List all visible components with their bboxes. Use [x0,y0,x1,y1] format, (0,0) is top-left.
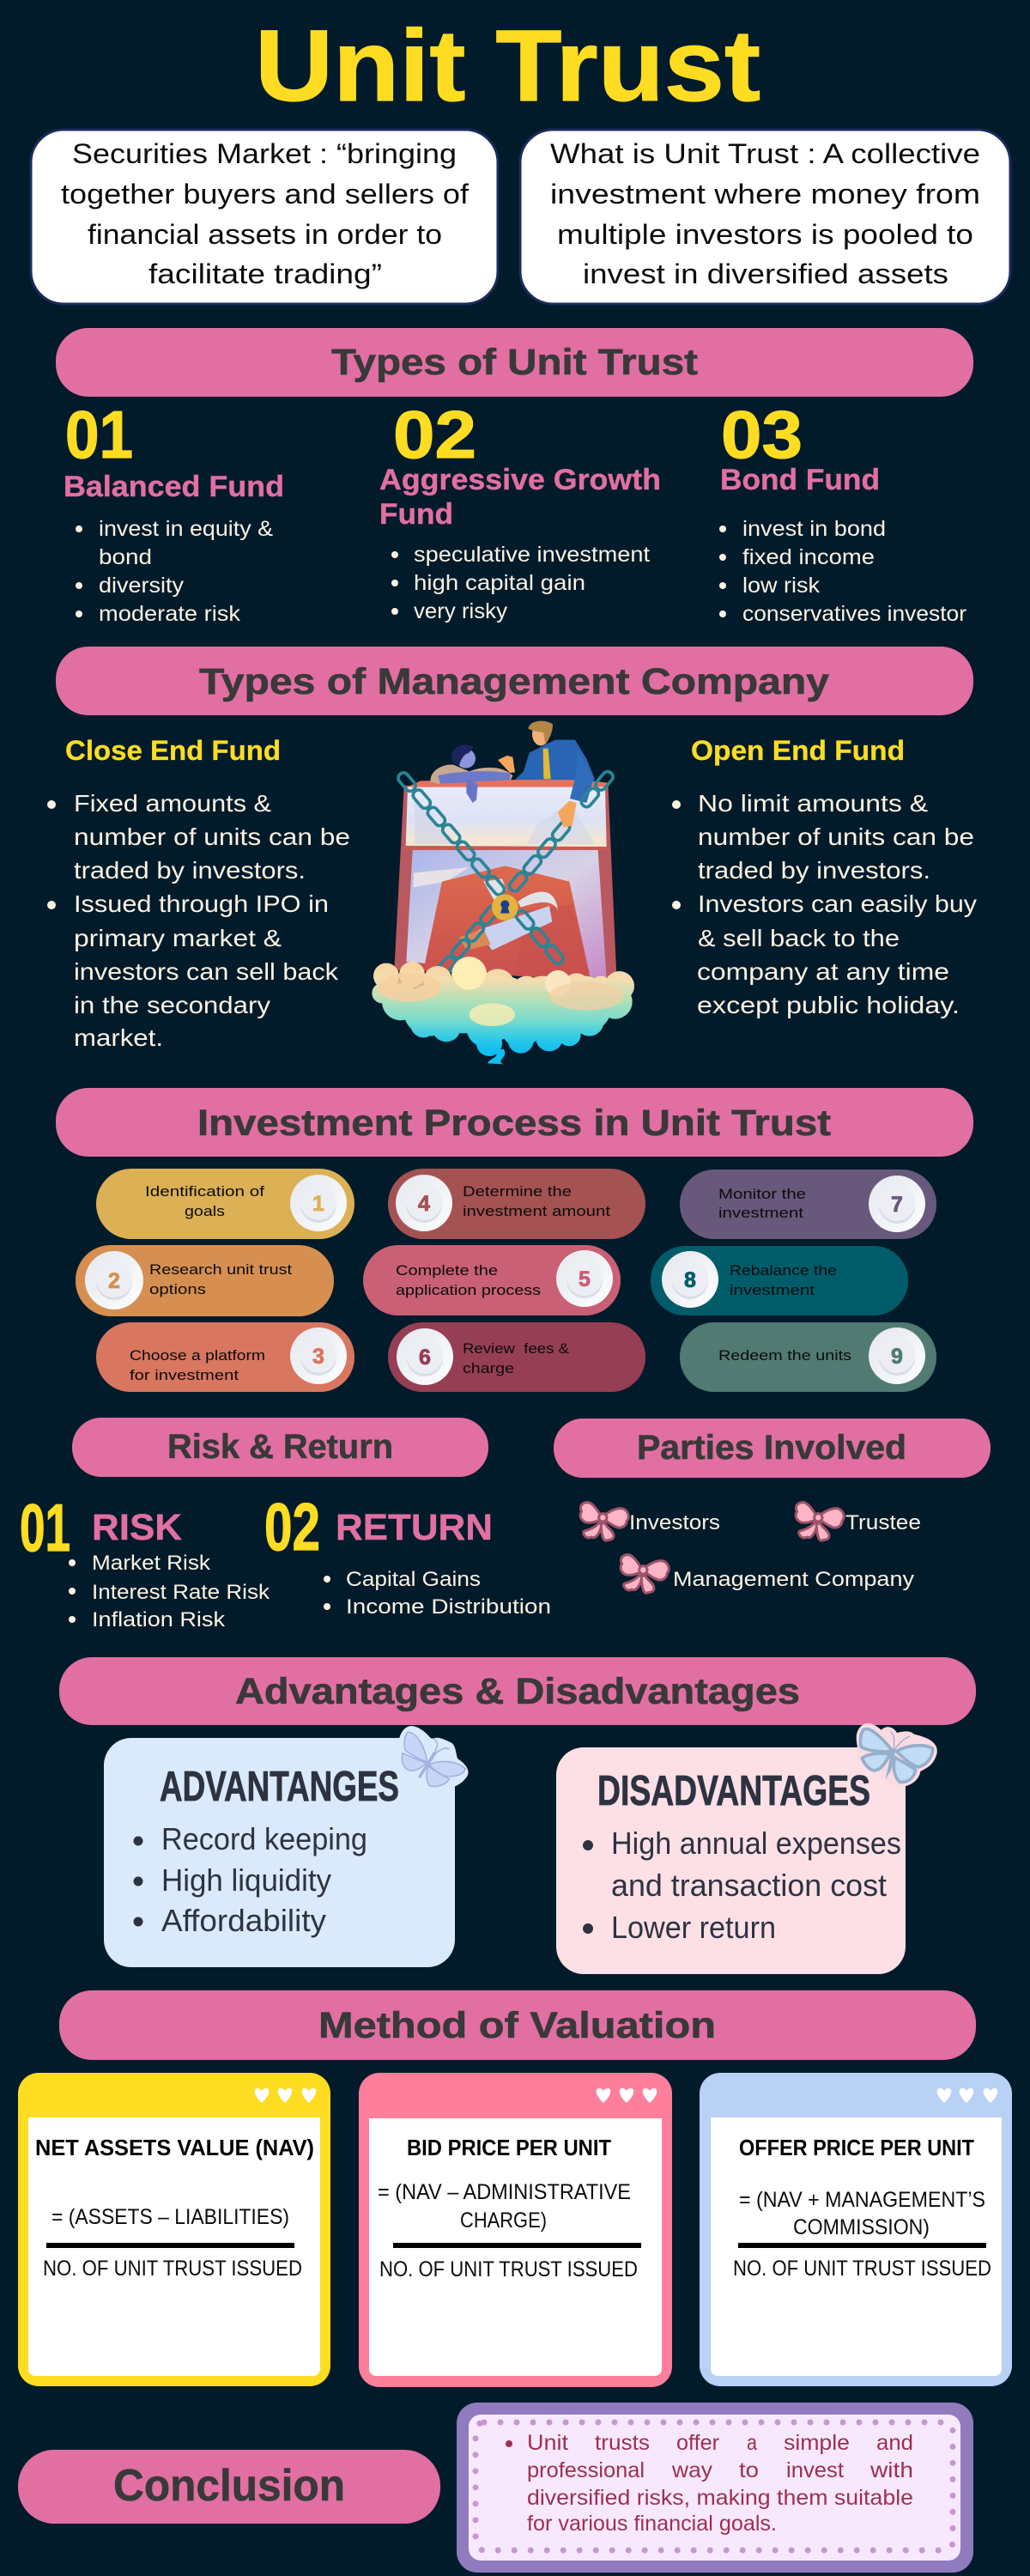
panel: open end fund [672,735,977,1018]
process step 7: Monitor the [718,1186,806,1202]
panel: parties involved list [580,1503,921,1593]
panel: risk: RISK [92,1507,182,1548]
panel: aggressive growth fund: speculative investment [414,543,650,567]
panel: aggressive growth fund: high capital gain [414,571,585,595]
panel: close end fund: market. [74,1024,163,1051]
panel: conclusion text: professional [527,2458,645,2482]
panel: conclusion text: invest [786,2458,844,2482]
panel: what is unit trust definition [520,130,1010,304]
panel: open end fund: & sell back to the [698,925,900,951]
panel: conclusion text: and [876,2431,913,2455]
panel: close end fund: in the secondary [74,992,270,1018]
panel: conclusion text: offer [676,2431,719,2455]
panel: open end fund: traded by investors. [698,857,930,884]
process step 8: 8 [684,1268,696,1292]
heading: parties involved [554,1419,991,1478]
panel: aggressive growth fund: very risky [414,599,508,623]
panel: what is unit trust definition: invest in diversified assets [583,258,948,289]
process step 2: options [149,1281,206,1297]
panel: aggressive growth fund: Aggressive Growth [379,464,661,496]
panel: risk [20,1490,270,1631]
panel: conclusion text: simple [784,2431,850,2455]
panel: advantages: Record keeping [161,1821,367,1856]
card: offer price per unit: = (NAV + MANAGEMENT’S [739,2188,985,2212]
process step 2: Research unit trust [149,1261,292,1278]
panel: parties involved list: Management Company [673,1568,914,1591]
panel: disadvantages: High annual expenses [611,1826,901,1861]
process step 3 [96,1322,354,1392]
panel: balanced fund: 01 [65,397,133,472]
process step 9 [680,1322,936,1392]
process step 6: 6 [419,1346,431,1370]
panel: disadvantages: and transaction cost [611,1868,887,1903]
illustration: chained box with two people on a cloud [372,721,634,1064]
panel: conclusion text [457,2403,973,2573]
icon: hearts [597,2088,657,2103]
panel: close end fund: traded by investors. [74,857,306,884]
panel: disadvantages: Lower return [611,1910,776,1945]
process step 5: application process [396,1282,541,1298]
panel: advantages: ADVANTANGES [160,1764,399,1810]
panel: securities market definition: financial assets in order to [88,219,442,250]
panel: return: Capital Gains [346,1568,481,1591]
panel: open end fund: Investors can easily buy [698,890,977,917]
process step 5 [363,1245,621,1315]
panel: bond fund: invest in bond [742,517,886,541]
panel: close end fund: number of units can be [74,823,350,850]
icon: butterfly [857,1723,937,1787]
process step 8: Rebalance the [730,1262,837,1279]
panel: what is unit trust definition: multiple investors is pooled to [557,219,973,250]
panel: parties involved list: Investors [629,1511,720,1534]
process step 2 [76,1245,334,1316]
panel: advantages: Affordability [161,1903,326,1938]
heading: advantages and disadvantages [59,1657,976,1725]
heading: advantages and disadvantages: Advantages & Disadvantages [235,1671,800,1712]
panel: risk: Market Risk [92,1552,211,1575]
panel: close end fund: primary market & [74,925,282,951]
heading: method of valuation: Method of Valuation [318,2005,716,2046]
panel: risk: Interest Rate Risk [92,1581,270,1604]
icon: hearts [937,2088,997,2103]
panel: balanced fund: diversity [99,574,185,598]
panel: conclusion text: trusts [595,2431,650,2455]
heading: risk and return [72,1418,488,1477]
heading: types of management company: Types of Management Company [199,661,829,702]
heading: risk and return: Risk & Return [167,1428,393,1466]
process step 1: goals [185,1203,225,1219]
heading: types of unit trust [56,328,973,397]
process step 4: Determine the [463,1183,572,1200]
panel: close end fund: investors can sell back [74,958,339,985]
card: bid price per unit: NO. OF UNIT TRUST ISSUED [379,2257,638,2281]
panel: close end fund: Close End Fund [65,735,281,766]
panel: risk: 01 [20,1490,70,1565]
panel: balanced fund: moderate risk [99,602,241,626]
panel: securities market definition: Securities Market : “bringing [72,138,457,169]
card: net assets value: NO. OF UNIT TRUST ISSUED [43,2257,302,2281]
heading: investment process: Investment Process in Unit Trust [197,1103,831,1144]
process step 3: Choose a platform [130,1347,265,1364]
card: net assets value [18,2073,330,2386]
panel: conclusion text: diversified risks, making them suitable [527,2486,913,2510]
icon: hearts [255,2088,316,2103]
panel: what is unit trust definition: investment where money from [550,179,980,210]
icon: bow [621,1555,669,1593]
process step 5: 5 [579,1267,591,1291]
process step 4: 4 [418,1192,430,1216]
panel: return [264,1489,551,1619]
panel: aggressive growth fund: Fund [379,498,453,531]
process step 1: 1 [312,1192,324,1216]
process step 1 [96,1169,354,1239]
panel: bond fund: low risk [742,574,821,598]
panel: what is unit trust definition: What is Unit Trust : A collective [550,138,980,169]
process step 5: Complete the [396,1262,498,1279]
heading: method of valuation [59,1990,976,2060]
card: net assets value: = (ASSETS – LIABILITIES) [52,2205,289,2229]
panel: balanced fund: bond [99,545,152,569]
process step 7 [680,1170,936,1239]
panel: advantages [104,1726,469,1967]
panel: bond fund: Bond Fund [720,464,880,496]
card: offer price per unit: COMMISSION) [793,2215,930,2239]
heading: parties involved: Parties Involved [637,1429,906,1467]
panel: conclusion text: to [739,2458,759,2482]
card: offer price per unit [700,2073,1012,2386]
heading: conclusion: Conclusion [113,2461,345,2511]
process step 2: 2 [108,1269,120,1293]
panel: risk: Inflation Risk [92,1608,226,1631]
icon: butterfly [399,1726,469,1790]
panel: conclusion text: Unit [527,2431,568,2455]
person: seated man on the left [431,744,512,803]
process step 3: 3 [312,1345,324,1369]
panel: bond fund: fixed income [742,545,875,569]
panel: securities market definition: facilitate trading” [148,258,382,289]
process step 8: investment [730,1282,815,1298]
panel: balanced fund: Balanced Fund [64,471,284,503]
panel: aggressive growth fund: 02 [393,397,476,472]
panel: balanced fund [64,397,284,626]
panel: parties involved list: Trustee [845,1511,921,1534]
panel: balanced fund: invest in equity & [99,517,273,541]
card: bid price per unit: CHARGE) [460,2208,547,2233]
card: bid price per unit: BID PRICE PER UNIT [407,2135,611,2160]
process step 7: investment [718,1205,803,1221]
heading: types of unit trust: Types of Unit Trust [331,342,698,383]
process step 3: for investment [130,1367,239,1383]
card: bid price per unit: = (NAV – ADMINISTRATIVE [378,2180,631,2204]
panel: return: RETURN [336,1507,493,1548]
panel: return: Income Distribution [346,1595,551,1619]
panel: conclusion text: way [671,2458,713,2482]
process step 8 [651,1246,908,1315]
process step 1: Identification of [145,1183,264,1200]
panel: bond fund [719,397,966,626]
heading: conclusion [18,2450,440,2524]
heading: types of management company [56,647,973,715]
panel: open end fund: Open End Fund [691,735,905,766]
card: offer price per unit: NO. OF UNIT TRUST ISSUED [733,2257,991,2281]
process step 4 [388,1169,645,1239]
process step 7: 7 [891,1193,903,1217]
panel: return: 02 [264,1489,320,1564]
process step 9: 9 [891,1345,903,1369]
panel: close end fund: Fixed amounts & [74,790,271,817]
process step 9: Redeem the units [718,1347,851,1364]
panel: conclusion text: a [747,2431,757,2455]
process step 6: charge [463,1360,514,1376]
panel: open end fund: company at any time [697,958,949,985]
title: Unit Trust [255,9,760,123]
panel: open end fund: No limit amounts & [698,790,928,817]
panel: securities market definition [31,130,498,304]
icon: bow [580,1503,628,1540]
panel: close end fund: Issued through IPO in [74,890,329,917]
card: offer price per unit: OFFER PRICE PER UNIT [739,2135,974,2160]
panel: open end fund: number of units can be [698,823,974,850]
panel: conclusion text: with [869,2458,913,2482]
person: standing man on the right [498,721,595,803]
panel: open end fund: except public holiday. [697,992,960,1018]
panel: close end fund [47,735,350,1051]
card: bid price per unit [359,2073,672,2387]
panel: securities market definition: together buyers and sellers of [61,179,469,210]
process step 6 [388,1322,645,1392]
process step 6: Review fees & [463,1340,570,1357]
panel: advantages: High liquidity [161,1862,331,1898]
panel: disadvantages: DISADVANTAGES [597,1768,870,1814]
panel: bond fund: conservatives investor [742,602,966,626]
panel: aggressive growth fund [379,397,661,623]
icon: bow [796,1503,844,1540]
heading: investment process [56,1088,973,1157]
panel: conclusion text: for various financial goals. [527,2512,777,2536]
process step 4: investment amount [463,1203,610,1219]
panel: disadvantages [556,1723,937,1974]
card: net assets value: NET ASSETS VALUE (NAV) [35,2135,314,2160]
panel: bond fund: 03 [721,397,803,472]
